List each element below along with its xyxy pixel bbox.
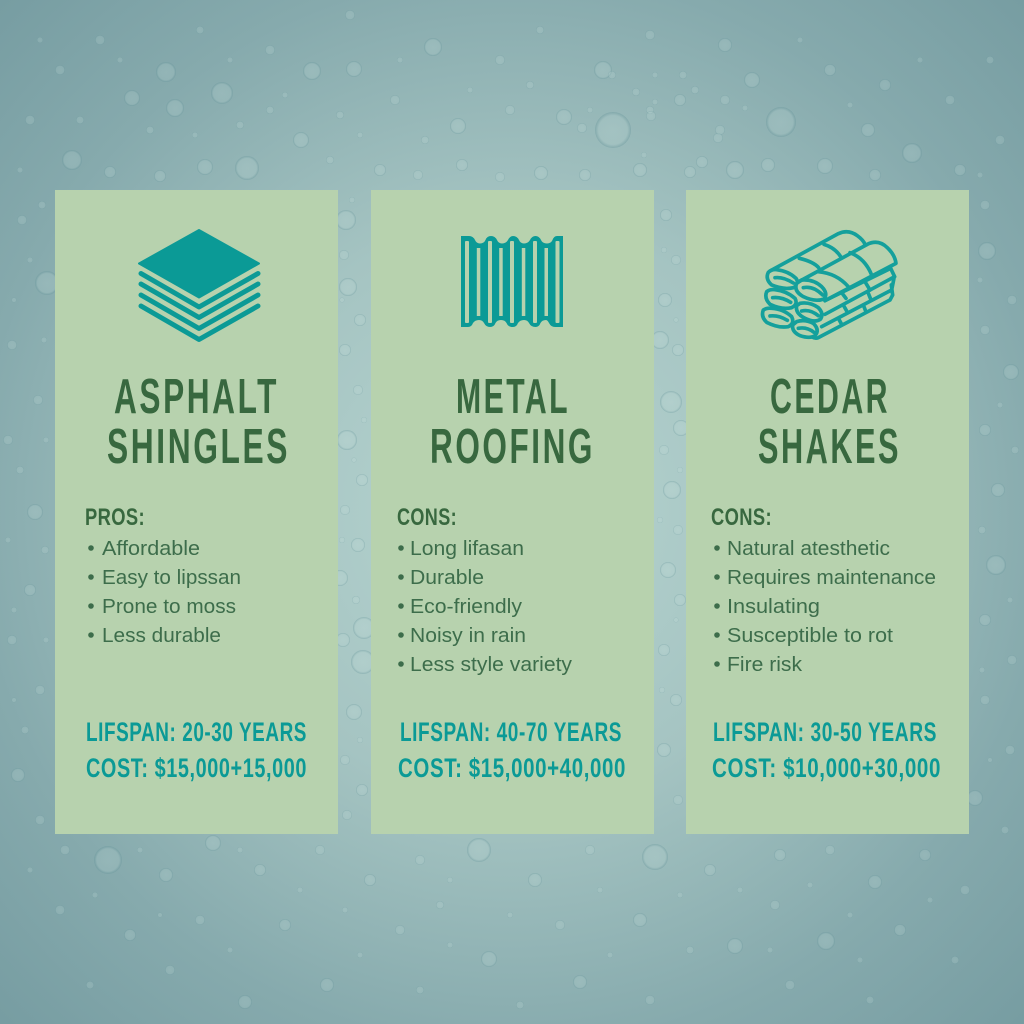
heading: asphalt shingles bbox=[107, 370, 290, 474]
list: cons: CONS: bbox=[397, 504, 457, 531]
heading: asphalt shingles: SHINGLES bbox=[107, 420, 290, 474]
list: cons: Natural atesthetic bbox=[727, 538, 890, 560]
list: pros: PROS: bbox=[85, 504, 145, 531]
list: cons bbox=[711, 504, 936, 676]
heading: metal roofing: METAL bbox=[456, 370, 570, 424]
stats: lifespan and cost: COST: $10,000+30,000 bbox=[712, 753, 941, 783]
heading: cedar shakes bbox=[758, 370, 901, 474]
panel: metal roofing bbox=[371, 190, 654, 834]
icon: stacked shingles bbox=[139, 230, 259, 340]
list: pros: Affordable bbox=[102, 538, 200, 560]
panel: cedar shakes bbox=[686, 190, 969, 834]
list: cons bbox=[397, 504, 572, 676]
list: cons: CONS: bbox=[711, 504, 772, 531]
heading: cedar shakes: CEDAR bbox=[770, 370, 890, 424]
heading: asphalt shingles: ASPHALT bbox=[114, 370, 279, 424]
icon: cedar shake bundles bbox=[763, 232, 896, 338]
stats: lifespan and cost: LIFSPAN: 20-30 YEARS bbox=[86, 717, 307, 747]
list: cons: Noisy in rain bbox=[410, 625, 526, 647]
panel: asphalt shingles bbox=[55, 190, 338, 834]
heading: metal roofing bbox=[430, 370, 595, 474]
stats: lifespan and cost: LIFSPAN: 40-70 YEARS bbox=[400, 717, 622, 747]
list: pros: Less durable bbox=[102, 625, 221, 647]
stats: lifespan and cost bbox=[398, 717, 626, 783]
list: cons: Eco-friendly bbox=[410, 596, 522, 618]
list: cons: Requires maintenance bbox=[727, 567, 936, 589]
list: cons: Less style variety bbox=[410, 654, 572, 676]
list: cons: Insulating bbox=[727, 596, 820, 618]
stats: lifespan and cost bbox=[712, 717, 941, 783]
heading: metal roofing: ROOFING bbox=[430, 420, 595, 474]
icon: corrugated metal bbox=[461, 236, 563, 327]
list: pros: Easy to lipssan bbox=[102, 567, 241, 589]
stats: lifespan and cost: COST: $15,000+15,000 bbox=[86, 753, 307, 783]
list: cons: Durable bbox=[410, 567, 484, 589]
stats: lifespan and cost: LIFSPAN: 30-50 YEARS bbox=[713, 717, 937, 747]
stats: lifespan and cost: COST: $15,000+40,000 bbox=[398, 753, 626, 783]
list: cons: Fire risk bbox=[727, 654, 803, 676]
heading: cedar shakes: SHAKES bbox=[758, 420, 901, 474]
list: cons: Susceptible to rot bbox=[727, 625, 893, 647]
list: cons: Long lifasan bbox=[410, 538, 524, 560]
list: pros bbox=[85, 504, 241, 647]
list: pros: Prone to moss bbox=[102, 596, 236, 618]
stats: lifespan and cost bbox=[86, 717, 307, 783]
